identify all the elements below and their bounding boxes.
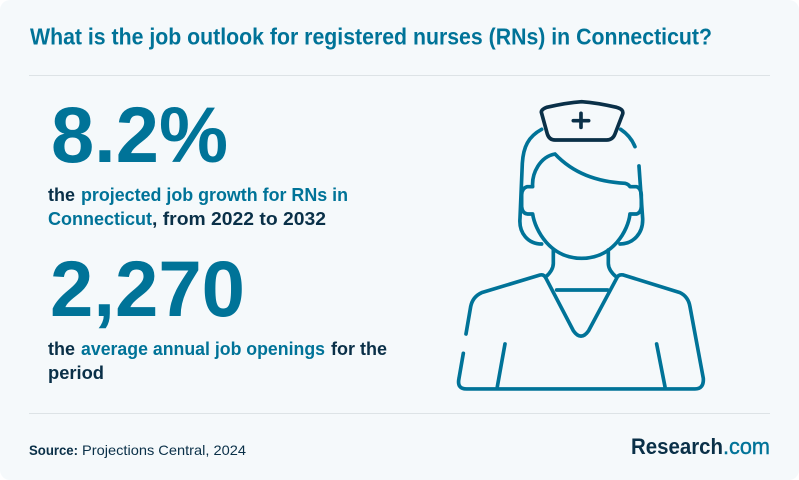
logo: Research.com: Research [631,434,723,459]
big number: 2,270: 2,270 [50,244,245,333]
logo: Research.com: .com [723,434,770,459]
description: projected job growth [48,185,348,229]
description: projected job growth: Connecticut [48,209,152,229]
description: projected job growth: projected job growth for RNs in [81,185,348,205]
description: average annual openings: for the [331,339,387,359]
stat: 2,270 annual openings [48,244,387,383]
nurse outline: hair, face, body [459,129,703,389]
title: What is the job outlook for registered nurses (RNs) in Connecticut? [30,24,712,50]
icon: nurse [459,102,703,389]
big number: 8.2%: 8.2% [51,90,228,179]
nurse cap with cross [541,102,623,140]
description: projected job growth: the [48,185,75,205]
source note: Source: [29,442,78,458]
stat: 8.2% job growth [48,90,348,229]
description: average annual openings: average annual job openings [81,339,325,359]
description: projected job growth: , from 2022 to 2032 [152,209,326,229]
source note: Projections Central, 2024 [82,442,246,458]
description: average annual openings [48,339,387,383]
description: average annual openings: period [48,363,104,383]
description: average annual openings: the [48,339,75,359]
